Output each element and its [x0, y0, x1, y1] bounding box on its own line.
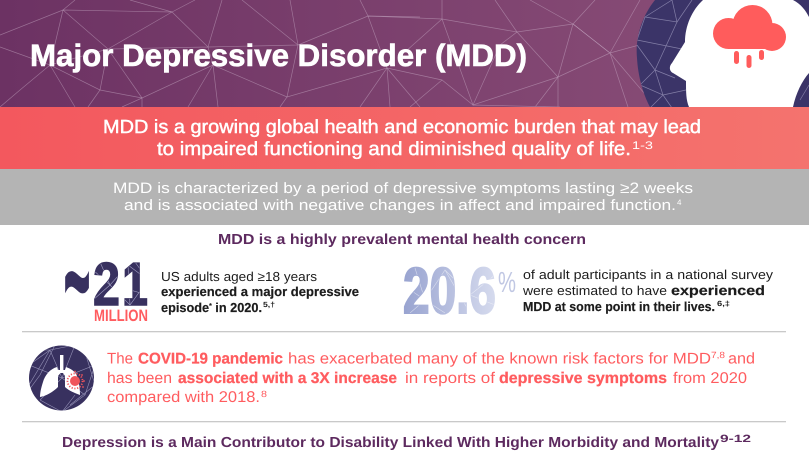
text: adult participants: of adult participants in a national survey [523, 267, 774, 282]
grey band definition: 4 [677, 198, 682, 207]
text: adult participants [522, 267, 774, 314]
stat: 20.6 percent: % [498, 267, 516, 299]
text: adult participants: were estimated to have [522, 283, 667, 298]
callout: COVID-19: in reports of [405, 370, 496, 387]
footer heading: Depression is a Main Contributor to Disability Linked With Higher Morbidity and Mortality [62, 435, 719, 451]
coral band statement: MDD is a growing global health and economic burden that may lead [103, 117, 701, 138]
callout: COVID-19 [107, 350, 755, 406]
text: US adults [161, 269, 359, 315]
head silhouette with rain cloud [637, 0, 809, 108]
text: adult participants: MDD at some point in their lives. [523, 299, 715, 314]
lungs [40, 355, 80, 397]
title: Major Depressive Disorder (MDD) [30, 38, 527, 73]
stat: 21 million: ~ [64, 214, 90, 348]
stat: 21 million: MILLION [94, 307, 148, 325]
callout: COVID-19: and [728, 350, 755, 368]
text: US adults: * [209, 303, 212, 310]
text: US adults: in 2020. [212, 300, 262, 315]
stat: 21 million: 1 [122, 250, 148, 318]
text: US adults: US adults aged ≥18 years [161, 269, 318, 284]
text: adult participants: experienced [671, 283, 765, 298]
callout: COVID-19: The [107, 350, 133, 368]
callout: COVID-19: from 2020 [673, 370, 747, 387]
stat: 21 million: 2 [93, 250, 120, 318]
text: US adults: episode [161, 300, 210, 315]
icon: rain cloud [713, 5, 786, 68]
stat: 21 million [65, 262, 148, 322]
callout: COVID-19: COVID-19 pandemic [138, 350, 283, 368]
callout: COVID-19: has exacerbated many of the known risk factors for MDD [288, 350, 711, 368]
callout: COVID-19: has been [107, 370, 172, 387]
callout: COVID-19: associated with a 3X increase [178, 370, 397, 387]
section heading: MDD is a highly prevalent mental health concern [218, 232, 586, 248]
callout: COVID-19: depressive symptoms [499, 370, 667, 387]
text: US adults: experienced a major depressive [161, 284, 359, 299]
grey band definition: and is associated with negative changes in affect and impaired function. [124, 197, 676, 214]
footer heading: 9-12 [720, 433, 751, 445]
coral band statement: to impaired functioning and diminished quality of life. [157, 139, 631, 160]
icon: lungs with virus [29, 345, 95, 412]
grey band definition: MDD is characterized by a period of depressive symptoms lasting ≥2 weeks [113, 180, 693, 197]
text: US adults: 5,† [263, 300, 275, 309]
callout: COVID-19: 8 [261, 389, 267, 399]
stat: 20.6 percent [404, 266, 516, 315]
header banner [0, 0, 809, 107]
grey band definition [0, 169, 809, 225]
coral band statement: 1-3 [632, 140, 653, 152]
coral band statement [0, 107, 809, 169]
callout: COVID-19: 7,8 [711, 350, 725, 360]
stat: 20.6 percent: 20.6 [403, 254, 496, 327]
virus [68, 371, 85, 388]
callout: COVID-19: compared with 2018. [107, 389, 260, 406]
text: adult participants: 6,‡ [717, 299, 730, 308]
